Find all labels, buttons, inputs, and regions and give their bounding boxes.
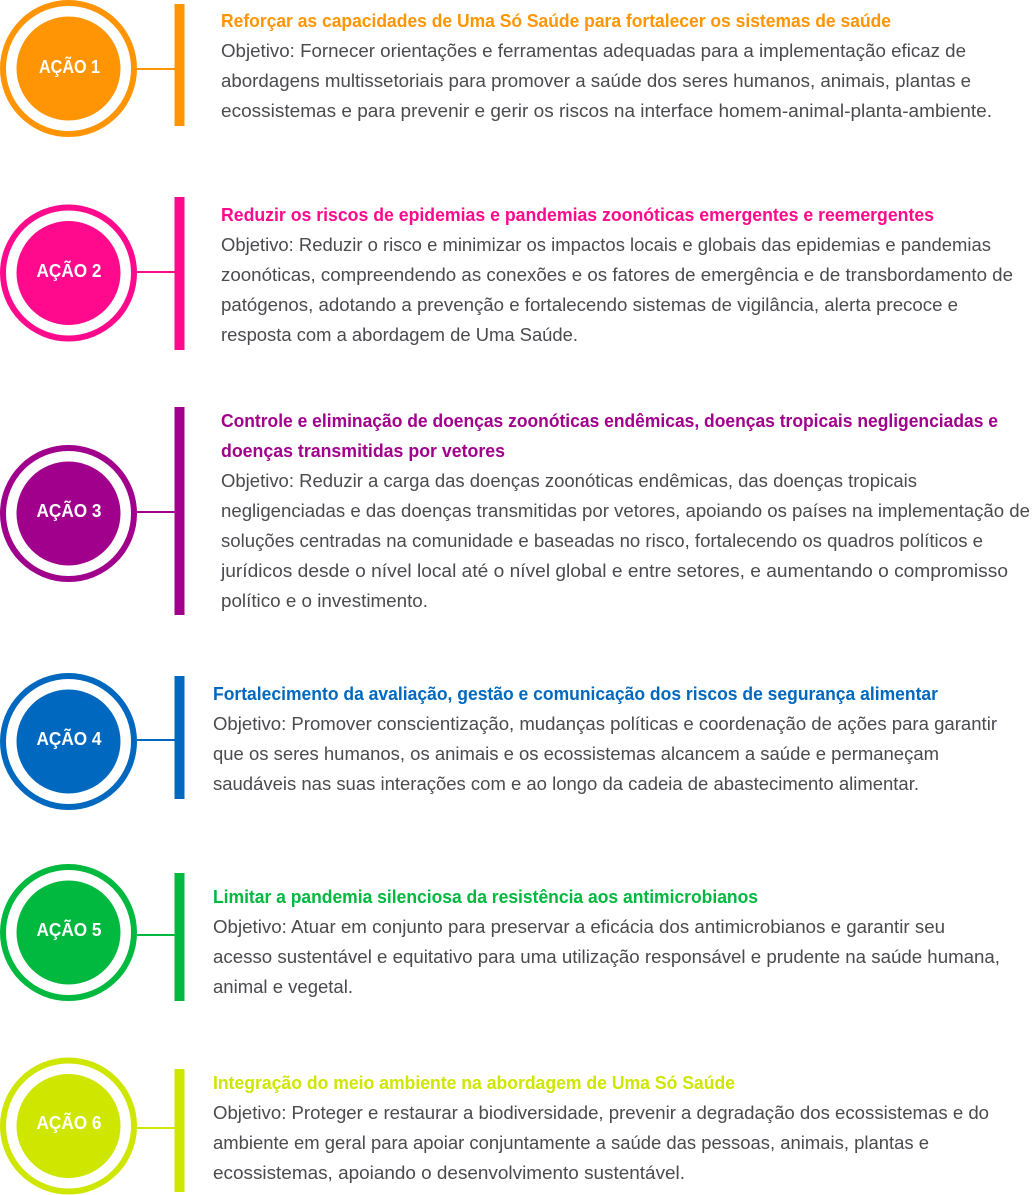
connector and bar: action 4: [137, 676, 184, 799]
text block: action 5 objective: Objetivo: Atuar em conjunto para preservar a eficácia dos antimicrobianos e garantir seu: [213, 917, 945, 937]
text block: action 3 objective: jurídicos desde o nível local até o nível global e entre setores, e aumentando o compromisso: [220, 561, 1008, 581]
connector and bar: action 3: [137, 407, 184, 615]
text block: action 3 objective: Objetivo: Reduzir a carga das doenças zoonóticas endêmicas, das doenças tropicais: [221, 471, 917, 491]
badge: action 6: [3, 1060, 134, 1192]
badge: action 6: AÇÃO 6: [36, 1112, 102, 1133]
text block: action 2 objective: [221, 235, 1013, 345]
connector and bar: action 2: [137, 197, 184, 350]
panel: action 4: [3, 676, 997, 807]
text block: action 6 objective: [213, 1103, 989, 1183]
text block: action 2 objective: zoonóticas, compreendendo as conexões e os fatores de emergência e de transbordamento de: [221, 265, 1013, 285]
text block: action 5 objective: acesso sustentável e equitativo para uma utilização responsável e prudente na saúde humana,: [213, 947, 1000, 967]
panel: action 2: [3, 197, 1013, 350]
connector and bar: action 1: [137, 4, 184, 126]
text block: action 3 objective: negligenciadas e das doenças transmitidas por vetores, apoiando os países na implementação de: [221, 501, 1030, 521]
text block: action 4 objective: saudáveis nas suas interações com e ao longo da cadeia de abastecimento alimentar.: [213, 774, 919, 794]
text block: action 6 objective: ecossistemas, apoiando o desenvolvimento sustentável.: [213, 1163, 685, 1183]
text block: action 1 objective: [221, 41, 992, 121]
text block: action 3 objective: soluções centradas na comunidade e baseadas no risco, fortalecendo os quadros políticos e: [221, 531, 983, 551]
badge: action 5: AÇÃO 5: [36, 919, 102, 940]
text block: action 4 objective: [213, 714, 997, 794]
connector and bar: action 6: [137, 1069, 184, 1192]
heading: action 3: Controle e eliminação de doenças zoonóticas endêmicas, doenças tropicais negligenciadas e: [221, 411, 998, 431]
text block: action 6 objective: ambiente em geral para apoiar conjuntamente a saúde das pessoas, animais, plantas e: [213, 1133, 929, 1153]
badge: action 4: [3, 676, 134, 807]
badge: action 2: AÇÃO 2: [36, 260, 102, 281]
text block: action 1 objective: abordagens multissetoriais para promover a saúde dos seres humanos, animais, plantas e: [221, 71, 971, 91]
badge: action 4: AÇÃO 4: [36, 728, 102, 749]
text block: action 5 objective: [213, 917, 1000, 997]
badge: action 5: [3, 867, 134, 998]
text block: action 4 objective: que os seres humanos, os animais e os ecossistemas alcancem a saúde e permaneçam: [213, 744, 939, 764]
heading: action 4: Fortalecimento da avaliação, gestão e comunicação dos riscos de segurança alimentar: [213, 684, 938, 704]
text block: action 6 objective: Objetivo: Proteger e restaurar a biodiversidade, prevenir a degradação dos ecossistemas e do: [213, 1103, 989, 1123]
panel: action 3: [3, 407, 1030, 615]
badge: action 2: [3, 208, 134, 338]
text block: action 1 objective: Objetivo: Fornecer orientações e ferramentas adequadas para a implementação eficaz de: [221, 41, 966, 61]
badge: action 1: AÇÃO 1: [39, 56, 100, 77]
text block: action 4 objective: Objetivo: Promover conscientização, mudanças políticas e coordenação de ações para garantir: [213, 714, 997, 734]
badge: action 3: AÇÃO 3: [36, 500, 102, 521]
heading: action 3: doenças transmitidas por vetores: [221, 441, 505, 461]
text block: action 2 objective: Objetivo: Reduzir o risco e minimizar os impactos locais e globais das epidemias e pandemias: [221, 235, 991, 255]
badge: action 3: [3, 448, 134, 579]
heading: action 3: [221, 411, 998, 461]
panel: action 1: [3, 3, 992, 134]
heading: action 6: Integração do meio ambiente na abordagem de Uma Só Saúde: [213, 1073, 735, 1093]
text block: action 3 objective: político e o investimento.: [221, 591, 428, 611]
heading: action 2: Reduzir os riscos de epidemias e pandemias zoonóticas emergentes e reemergentes: [221, 205, 934, 225]
connector and bar: action 5: [137, 873, 184, 1001]
text block: action 2 objective: resposta com a abordagem de Uma Saúde.: [221, 325, 578, 345]
badge: action 1: [3, 3, 134, 134]
text block: action 5 objective: animal e vegetal.: [213, 977, 353, 997]
panel: action 5: [3, 867, 1000, 1001]
panel: action 6: [3, 1060, 989, 1192]
heading: action 1: Reforçar as capacidades de Uma Só Saúde para fortalecer os sistemas de saúde: [221, 11, 891, 31]
text block: action 1 objective: ecossistemas e para prevenir e gerir os riscos na interface homem-animal-planta-ambiente.: [221, 101, 992, 121]
heading: action 5: Limitar a pandemia silenciosa da resistência aos antimicrobianos: [213, 887, 758, 907]
text block: action 2 objective: patógenos, adotando a prevenção e fortalecendo sistemas de vigilância, alerta precoce e: [221, 295, 958, 315]
text block: action 3 objective: [220, 471, 1030, 611]
